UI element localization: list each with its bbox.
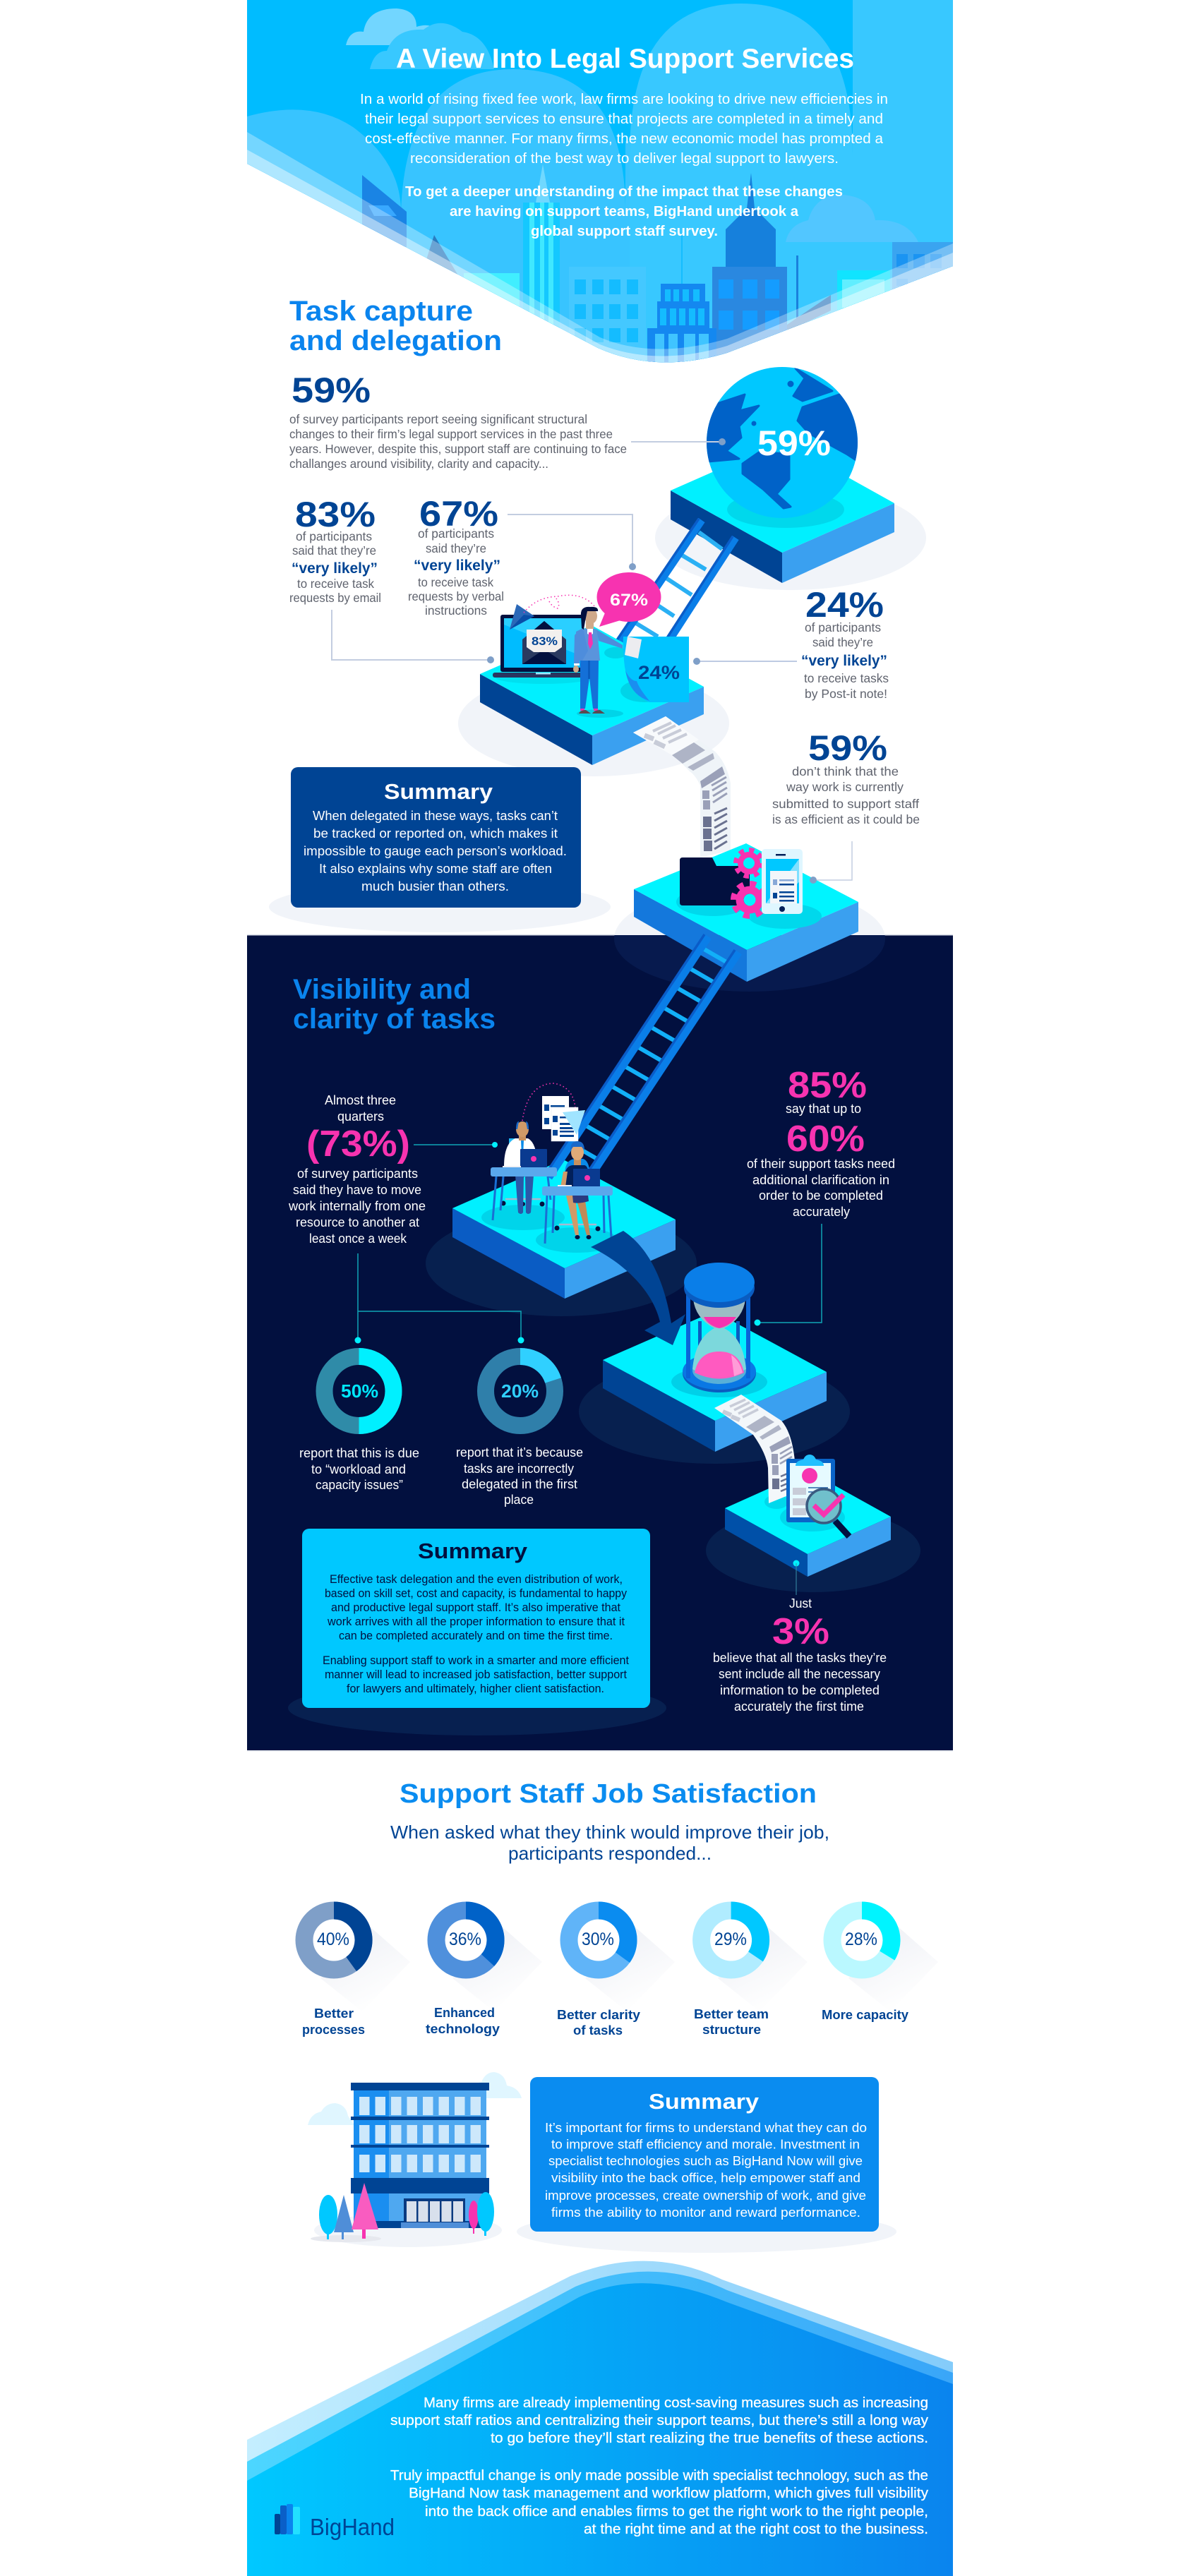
panel: summary 3: improve processes, create ownership of work, and give: [545, 2188, 866, 2203]
text block: intro: cost-effective manner. For many firms, the new economic model has prompted a: [365, 131, 884, 147]
platform: folder, gears and phone: [614, 843, 885, 992]
shadow: summary 3: [517, 2210, 896, 2253]
stat: almost three quarters 73%: least once a week: [309, 1232, 407, 1246]
chart: donut 30% better clarity: of tasks: [573, 2023, 623, 2038]
panel: summary 2: [302, 1529, 650, 1708]
text: donut 20% caption: delegated in the first: [462, 1477, 577, 1491]
connector: globe: [631, 438, 726, 445]
heading: visibility and clarity of tasks: clarity of tasks: [293, 1004, 496, 1035]
panel: summary 1: [291, 767, 581, 908]
stat: 59% structural changes: of survey participants report seeing significant structural: [289, 412, 587, 426]
stat: just 3%: Just: [789, 1596, 812, 1611]
stat: 83% by email: requests by email: [289, 591, 381, 605]
chart: donut 50%: [325, 1356, 394, 1426]
heading: visibility and clarity of tasks: [293, 974, 496, 1035]
stat: 83% by email: of participants: [296, 529, 372, 543]
heading: task capture and delegation: [289, 296, 502, 356]
text: donut 20% caption: place: [504, 1493, 534, 1507]
chart: donut 36% enhanced technology: Enhanced: [434, 2005, 495, 2020]
stat: 85% say up to 60%: say that up to: [786, 1102, 861, 1116]
stat: 59% structural changes: 59%: [292, 371, 371, 410]
text: job satisfaction intro: [390, 1822, 829, 1864]
stat: 83% by email: 83%: [295, 495, 376, 534]
icon: office building with trees: [308, 2072, 522, 2247]
panel: summary 1: It also explains why some staff are often: [319, 861, 552, 876]
stat: almost three quarters 73%: quarters: [337, 1109, 384, 1124]
connector: 83%: [332, 610, 494, 663]
text block: closing: support staff ratios and centralizing their support teams, but there’s still a long way: [390, 2413, 928, 2428]
stat: almost three quarters 73%: (73%): [306, 1124, 410, 1164]
text block: closing: [390, 2395, 928, 2537]
panel: summary 2: for lawyers and ultimately, higher client satisfaction.: [347, 1683, 604, 1695]
stat: almost three quarters 73%: resource to another at: [296, 1215, 419, 1229]
text block: closing: into the back office and enables firms to get the right work to the right people,: [425, 2504, 928, 2520]
icon: sticky note: 24%: [638, 662, 680, 683]
chart: donut 40% better processes: Better: [314, 2006, 354, 2021]
icon: paper ribbon: [714, 1395, 795, 1503]
stat: 59% structural changes: changes to their firm’s legal support services in the past three: [289, 427, 613, 441]
heading: visibility and clarity of tasks: Visibility and: [293, 974, 471, 1005]
connector: 24%: [693, 658, 797, 665]
panel: summary 3: Summary: [649, 2089, 760, 2114]
stat: 83% by email: to receive task: [297, 577, 374, 591]
chart: donut 28% more capacity: 28%: [845, 1930, 877, 1949]
stat: 67% verbal: said they’re: [426, 541, 486, 555]
title: A View Into Legal Support Services: [396, 44, 854, 74]
connector: 85% to hourglass: [754, 1224, 822, 1325]
text block: closing: Many firms are already implementing cost-saving measures such as increasing: [424, 2395, 928, 2411]
stat: 59% not efficient: way work is currently: [786, 780, 904, 794]
stat: almost three quarters 73%: Almost three: [325, 1093, 396, 1107]
stat: 67% verbal: instructions: [425, 603, 487, 618]
chart: donut 30% better clarity: [557, 1910, 675, 2038]
chart: donut 20%: 20%: [501, 1380, 539, 1402]
text: donut 20% caption: [456, 1445, 583, 1507]
stat: just 3%: [713, 1560, 887, 1714]
panel: summary 2: can be completed accurately and on time the first time.: [339, 1630, 613, 1642]
stat: 67% verbal: of participants: [418, 526, 494, 541]
icon: laptop with envelope: [493, 595, 595, 678]
platform: clipboard check: [706, 1395, 920, 1592]
panel: summary 2: work arrives with all the proper information to ensure that it: [327, 1615, 625, 1628]
panel: summary 3: to improve staff efficiency and morale. Investment in: [551, 2137, 860, 2151]
stat: 83% by email: “very likely”: [292, 560, 378, 577]
chart: donut 30% better clarity: 30%: [582, 1930, 614, 1949]
panel: summary 1: be tracked or reported on, which makes it: [313, 826, 558, 841]
stat: 59% structural changes: challanges around visibility, clarity and capacity...: [289, 457, 548, 471]
icon: magnifier with check: [807, 1489, 849, 1536]
text block: intro: their legal support services to ensure that projects are completed in a timely and: [365, 112, 883, 127]
stat: 83% by email: said that they’re: [292, 543, 376, 558]
chart: donut 29% better team structure: Better team: [694, 2006, 769, 2021]
icon: speech bubble 67%: [597, 572, 661, 627]
stat: 59% not efficient: submitted to support staff: [772, 797, 919, 811]
stat: 83% by email: [289, 495, 381, 605]
stat: 24% post-it: 24%: [805, 585, 884, 625]
panel: summary 1: When delegated in these ways, tasks can’t: [313, 808, 558, 823]
stat: 24% post-it: [801, 585, 889, 701]
panel: summary 3: firms the ability to monitor and reward performance.: [551, 2205, 860, 2220]
text block: intro: global support staff survey.: [531, 224, 718, 239]
connector: 59% not efficient: [810, 841, 852, 884]
stat: 59% not efficient: don’t think that the: [792, 764, 899, 778]
stat: 24% post-it: by Post-it note!: [805, 687, 887, 701]
icon: clipboard: [786, 1455, 835, 1522]
logo: BigHand: [275, 2504, 395, 2540]
stat: 24% post-it: “very likely”: [801, 653, 887, 669]
text block: intro: [360, 92, 888, 239]
panel: summary 2: Enabling support staff to work in a smarter and more efficient: [323, 1654, 629, 1667]
text: donut 20% caption: tasks are incorrectly: [464, 1462, 574, 1476]
icon: ladder down: [545, 934, 738, 1177]
icon: hourglass: [683, 1263, 756, 1392]
icon: sticky note: [623, 637, 689, 702]
icon: city skyline: [362, 164, 953, 373]
text block: closing: Truly impactful change is only made possible with specialist technology, such as the: [390, 2468, 928, 2484]
stat: 85% say up to 60%: 85%: [788, 1065, 867, 1106]
icon: stacked documents: [542, 1096, 585, 1141]
panel: summary 1: much busier than others.: [361, 879, 509, 893]
platform: hourglass: [579, 1263, 850, 1464]
stat: 59% structural changes: years. However, despite this, support staff are continuing to face: [289, 442, 627, 456]
text: donut 50% caption: to “workload and: [311, 1462, 406, 1476]
connector: 67%: [508, 514, 636, 570]
logo: BigHand: BigHand: [310, 2514, 395, 2540]
text: job satisfaction intro: When asked what they think would improve their job,: [390, 1822, 829, 1843]
panel: footer banner: [247, 2261, 953, 2576]
panel: header banner: [247, 0, 953, 374]
arrow: workers to hourglass: [591, 1231, 685, 1345]
connector: 73% to worker: [414, 1142, 498, 1148]
platform: person and laptop: [458, 519, 736, 776]
shadow: summary 1: [269, 881, 611, 932]
chart: donut 29% better team structure: [694, 1910, 808, 2037]
stat: 59% not efficient: is as efficient as it could be: [772, 812, 920, 826]
text block: closing: BigHand Now task management and workflow platform, which gives full visibility: [409, 2486, 928, 2501]
stat: 85% say up to 60%: 60%: [786, 1119, 865, 1160]
text: job satisfaction intro: participants responded...: [508, 1843, 712, 1864]
panel: summary 2: and productive legal support staff. It’s also imperative that: [331, 1601, 620, 1614]
icon: person with paper: [573, 607, 642, 714]
text block: closing: at the right time and at the right cost to the business.: [584, 2522, 928, 2537]
icon: folder: [680, 857, 750, 905]
icon: clouds: [346, 8, 918, 242]
panel: summary 2: Effective task delegation and the even distribution of work,: [330, 1573, 623, 1586]
stat: 85% say up to 60%: additional clarification in: [752, 1173, 889, 1187]
chart: donut 28% more capacity: [822, 1910, 938, 2022]
icon: worker two: [542, 1141, 613, 1244]
text block: intro: In a world of rising fixed fee work, law firms are looking to drive new efficiencies in: [360, 92, 888, 107]
icon: laptop with envelope: 83%: [532, 634, 558, 648]
stat: 24% post-it: to receive tasks: [804, 671, 889, 685]
stat: 85% say up to 60%: accurately: [793, 1205, 850, 1219]
text block: intro: To get a deeper understanding of the impact that these changes: [405, 184, 843, 200]
icon: speech bubble 67%: 67%: [610, 591, 648, 610]
panel: summary 1: impossible to gauge each person’s workload.: [304, 843, 567, 858]
heading: task capture and delegation: Task capture: [289, 296, 473, 327]
stat: just 3%: 3%: [772, 1611, 829, 1652]
panel: summary 2: manner will lead to increased job satisfaction, better support: [325, 1668, 627, 1681]
chart: donut 36% enhanced technology: [426, 1910, 542, 2036]
stat: just 3%: accurately the first time: [734, 1699, 864, 1714]
chart: donut 36% enhanced technology: 36%: [449, 1930, 481, 1949]
stat: 59% structural changes: [289, 371, 627, 471]
stat: 24% post-it: said they’re: [812, 635, 873, 649]
heading: task capture and delegation: and delegation: [289, 325, 502, 356]
panel: summary 3: specialist technologies such as BigHand Now will give: [548, 2153, 863, 2168]
text: donut 50% caption: report that this is due: [299, 1446, 419, 1460]
panel: summary 3: [530, 2077, 879, 2232]
chart: donut 28% more capacity: More capacity: [822, 2007, 909, 2022]
stat: 85% say up to 60%: order to be completed: [759, 1188, 883, 1203]
panel: dark section background: [247, 934, 953, 1752]
stat: just 3%: sent include all the necessary: [719, 1667, 880, 1681]
icon: paper ribbon to folder: [633, 716, 731, 857]
icon: phone with document: [762, 849, 803, 914]
chart: donut 36% enhanced technology: technology: [426, 2021, 500, 2036]
text: donut 50% caption: [299, 1446, 419, 1492]
chart: donut 29% better team structure: structure: [702, 2022, 761, 2037]
stat: 67% verbal: requests by verbal: [408, 589, 504, 603]
stat: 85% say up to 60%: [747, 1065, 895, 1219]
stat: 24% post-it: of participants: [805, 620, 881, 634]
stat: 67% verbal: “very likely”: [414, 558, 500, 574]
platform: globe: [655, 367, 926, 590]
chart: donut 29% better team structure: 29%: [714, 1930, 747, 1949]
chart: donut 50%: 50%: [341, 1380, 378, 1402]
panel: summary 1: Summary: [384, 779, 493, 804]
text: donut 50% caption: capacity issues”: [316, 1478, 403, 1492]
platform: two workers at desks: [426, 934, 738, 1316]
stat: almost three quarters 73%: said they have to move: [293, 1183, 421, 1197]
text: donut 20% caption: report that it’s because: [456, 1445, 583, 1459]
stat: just 3%: believe that all the tasks they’re: [713, 1651, 887, 1665]
stat: 67% verbal: [408, 494, 504, 618]
text block: closing: to go before they’ll start realizing the true benefits of these actions.: [491, 2431, 928, 2446]
icon: globe: 59%: [757, 423, 831, 463]
stat: 67% verbal: 67%: [419, 494, 498, 534]
stat: almost three quarters 73%: work internally from one: [288, 1199, 426, 1213]
icon: ladder to globe: [608, 519, 736, 655]
icon: globe: [699, 367, 865, 518]
stat: 59% not efficient: [772, 728, 920, 826]
connector: 73% to donuts: [354, 1253, 524, 1344]
text block: intro: reconsideration of the best way to deliver legal support to lawyers.: [410, 151, 839, 167]
icon: worker one: [491, 1083, 575, 1220]
stat: almost three quarters 73%: [288, 1093, 426, 1246]
panel: summary 2: based on skill set, cost and capacity, is fundamental to happy: [325, 1587, 628, 1600]
chart: donut 30% better clarity: Better clarity: [557, 2007, 641, 2022]
stat: almost three quarters 73%: of survey participants: [297, 1167, 418, 1181]
panel: summary 2: Summary: [418, 1539, 528, 1563]
chart: donut 40% better processes: [302, 1910, 410, 2037]
panel: summary 3: It’s important for firms to understand what they can do: [545, 2120, 867, 2135]
text block: intro: are having on support teams, BigHand undertook a: [450, 204, 799, 219]
chart: donut 40% better processes: 40%: [317, 1930, 349, 1949]
heading: support staff job satisfaction: Support Staff Job Satisfaction: [400, 1779, 817, 1809]
chart: donut 40% better processes: processes: [302, 2022, 365, 2037]
stat: just 3%: information to be completed: [720, 1683, 880, 1697]
shadow: summary 2: [288, 1680, 666, 1735]
panel: summary 3: visibility into the back office, help empower staff and: [551, 2170, 860, 2185]
stat: 67% verbal: to receive task: [418, 575, 493, 589]
chart: donut 20%: [486, 1356, 555, 1426]
stat: 85% say up to 60%: of their support tasks need: [747, 1157, 895, 1171]
stat: 59% not efficient: 59%: [808, 728, 887, 768]
icon: gears: [733, 850, 766, 916]
